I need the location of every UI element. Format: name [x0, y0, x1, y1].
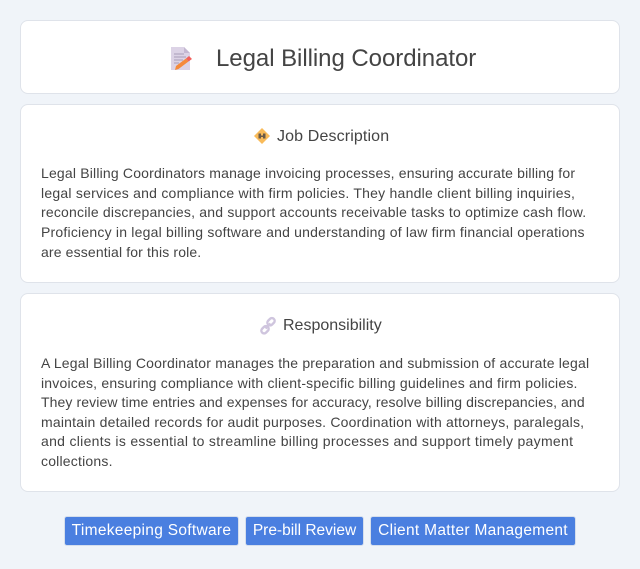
- panel: responsibility: [20, 293, 620, 492]
- heading: job description: Job Description: [277, 128, 389, 145]
- tag: client matter management: [370, 516, 576, 546]
- text block: responsibility: maintain detailed records for audit purposes. Coordination with attorneys, paralegals,: [41, 414, 584, 430]
- heading: responsibility: Responsibility: [283, 317, 382, 334]
- text block: responsibility: They review time entries and expenses for accuracy, resolve billing discrepancies, and: [41, 394, 585, 410]
- text block: job description: Proficiency in legal billing software and understanding of law firm financial operations: [41, 224, 585, 240]
- panel: job description: [20, 104, 620, 283]
- icon: diamond sign: [254, 128, 270, 144]
- text block: responsibility: and clients is essential to streamline billing processes and support timely payment: [41, 433, 573, 449]
- text block: job description: reconcile discrepancies, and support accounts receivable tasks to optimize cash flow.: [41, 204, 586, 220]
- text block: responsibility: collections.: [41, 453, 113, 469]
- text block: responsibility: A Legal Billing Coordinator manages the preparation and submission of accurate legal: [41, 355, 589, 371]
- panel: title card: [20, 20, 620, 94]
- tag: client matter management: Client Matter Management: [378, 522, 568, 539]
- text block: job description: Legal Billing Coordinators manage invoicing processes, ensuring accurate billing for: [41, 165, 575, 181]
- text block: job description: are essential for this role.: [41, 244, 201, 260]
- icon: document with pencil: [171, 47, 192, 70]
- title: Legal Billing Coordinator: [216, 45, 476, 72]
- text block: responsibility: invoices, ensuring compliance with client-specific billing guidelines and firm policies.: [41, 375, 578, 391]
- text block: job description: legal services and compliance with firm policies. They handle client billing inquiries,: [41, 185, 575, 201]
- text block: job description: [41, 165, 586, 260]
- tag: timekeeping software: Timekeeping Software: [72, 522, 231, 539]
- tag: pre-bill review: [245, 516, 364, 546]
- icon: chain link: [260, 316, 276, 335]
- text block: responsibility: [41, 355, 589, 469]
- tag: timekeeping software: [64, 516, 239, 546]
- tag: pre-bill review: Pre-bill Review: [253, 522, 356, 539]
